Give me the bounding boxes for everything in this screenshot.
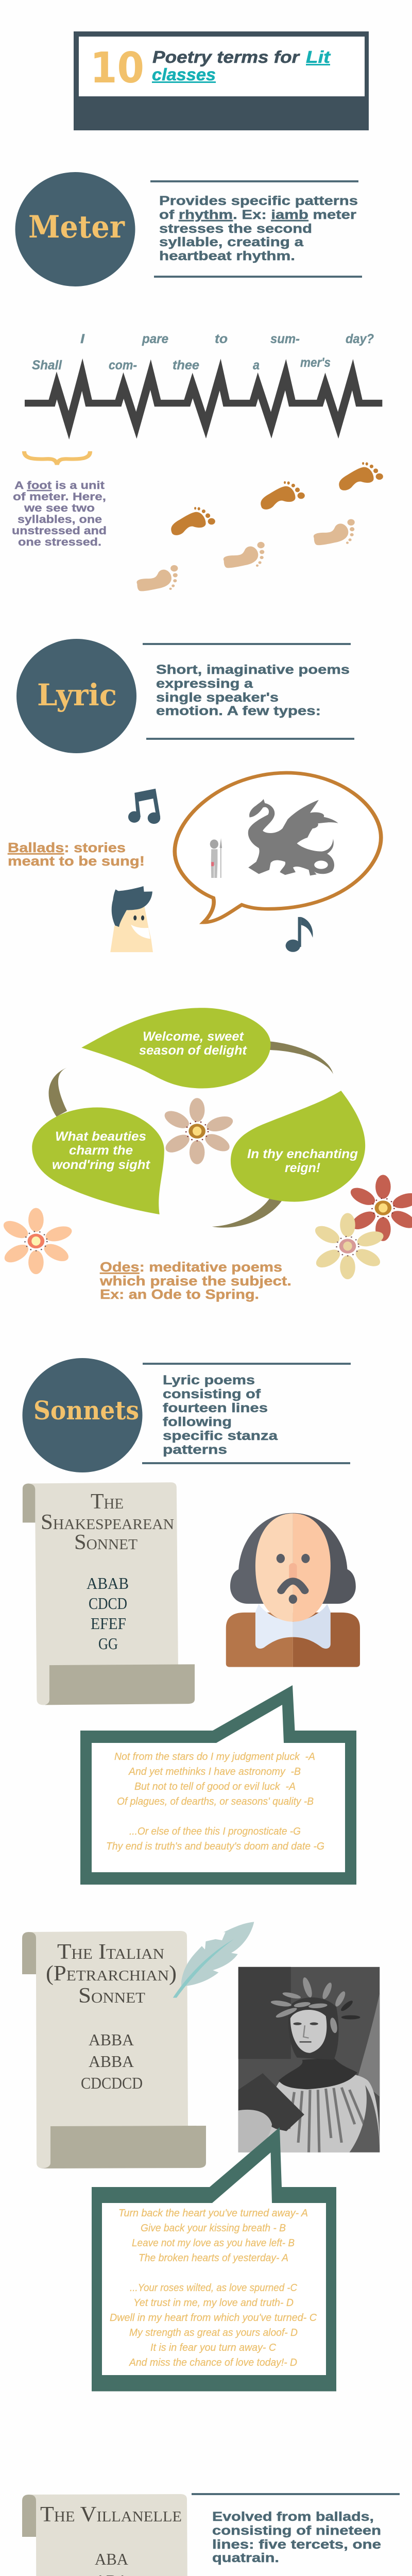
meter definition: heartbeat rhythm.	[159, 249, 295, 263]
scroll shape	[22, 1931, 206, 2168]
circle badge: Meter: Meter	[28, 209, 125, 245]
leaf text: season of delight	[139, 1043, 248, 1058]
icon: cream flower	[312, 1213, 386, 1279]
scroll shape	[22, 2494, 206, 2576]
leaf text	[52, 1029, 358, 1175]
scroll heading: (Petrarchian)	[46, 1962, 177, 1986]
lyric definition: emotion. A few types:	[156, 704, 321, 718]
sonnets definition: fourteen lines	[163, 1401, 268, 1415]
panel: villanelle scroll	[22, 2494, 206, 2576]
text: odes: Ex: an Ode to Spring.	[100, 1286, 259, 1302]
sonnets definition	[163, 1373, 278, 1457]
poem lines	[110, 2208, 317, 2368]
number ten: 10	[90, 44, 144, 93]
rhyme scheme: ABA	[95, 2550, 128, 2568]
poem lines: The broken hearts of yesterday- A	[139, 2252, 288, 2264]
title text	[152, 47, 331, 84]
poem lines	[106, 1751, 324, 1852]
circle badge: Sonnets: Sonnets	[33, 1395, 139, 1426]
text: foot definition: unstressed and	[12, 524, 107, 537]
poem lines: ...Your roses wilted, as love spurned -C	[130, 2282, 298, 2294]
poem lines: Yet trust in me, my love and truth- D	[133, 2297, 294, 2309]
poem lines: Not from the stars do I my judgment pluck -A	[114, 1751, 315, 1762]
syllables: I	[80, 332, 85, 346]
heartbeat line	[25, 375, 382, 425]
scroll heading: Sonnet	[78, 1984, 145, 2008]
text: ballads	[8, 840, 145, 869]
text: foot definition: syllables, one	[18, 513, 102, 526]
icon: Shakespeare portrait	[226, 1513, 360, 1667]
poem lines: Of plagues, of dearths, or seasons' quality -B	[117, 1796, 314, 1807]
text: odes	[99, 1259, 291, 1302]
syllables: mer's	[300, 355, 331, 370]
text: foot definition: of meter. Here,	[13, 490, 106, 503]
leaf stems and leaves	[32, 1008, 365, 1228]
text: ballads: meant to be sung!	[8, 853, 145, 869]
icon: peach flower	[0, 1208, 74, 1274]
leaf text: In thy enchanting	[247, 1147, 358, 1161]
icon: knight	[210, 838, 222, 878]
leaf text: What beauties	[55, 1129, 146, 1144]
icon: single music note	[286, 917, 313, 952]
leaf text: charm the	[69, 1143, 133, 1158]
icon: curly brace	[24, 451, 90, 465]
meter definition: of rhythm . Ex: iamb meter	[159, 208, 356, 222]
meter definition: stresses the second	[159, 222, 312, 236]
rhyme scheme: ABAB	[87, 1574, 129, 1592]
rhyme scheme: CDCD	[89, 1594, 127, 1613]
sonnets definition: Lyric poems	[163, 1373, 255, 1387]
leaf text: wond'ring sight	[52, 1158, 151, 1172]
text: foot definition: we see two	[24, 502, 95, 514]
syllables	[32, 332, 374, 372]
rhyme scheme	[81, 2030, 143, 2092]
sonnets definition: specific stanza	[163, 1429, 278, 1443]
text: odes: Odes : meditative poems	[100, 1259, 282, 1275]
syllables: Shall	[32, 358, 62, 372]
sonnets definition: patterns	[163, 1443, 227, 1457]
meter definition: syllable, creating a	[159, 235, 304, 249]
chart: iambic syllables above heartbeat line	[25, 332, 382, 425]
leaf text: reign!	[285, 1161, 320, 1175]
image: Petrarch portrait	[238, 1967, 380, 2153]
poem lines: But not to tell of good or evil luck -A	[134, 1781, 296, 1792]
rhyme scheme: EFEF	[91, 1614, 126, 1633]
syllables: thee	[173, 358, 199, 372]
sonnets definition: following	[163, 1415, 232, 1429]
poem lines: Dwell in my heart from which you've turned- C	[110, 2312, 317, 2324]
scroll heading: Sonnet	[74, 1531, 138, 1554]
icon: red flower	[347, 1175, 412, 1241]
scroll heading	[41, 1490, 174, 1554]
rhyme scheme: ABBA	[89, 2052, 134, 2071]
panel: title banner	[74, 31, 369, 130]
panel: odes leaves diagram	[32, 1008, 365, 1228]
syllables: sum-	[270, 332, 300, 346]
leaf text: Welcome, sweet	[143, 1029, 245, 1044]
meter definition	[159, 194, 358, 263]
panel: Shakespearean sonnet scroll	[23, 1482, 195, 1705]
panel: villanelle definition	[191, 2493, 400, 2576]
definition text: quatrain.	[212, 2551, 279, 2565]
definition text: consisting of nineteen	[212, 2523, 381, 2538]
scroll heading: The Italian	[57, 1940, 164, 1964]
definition text	[212, 2510, 381, 2565]
syllables: a	[253, 358, 260, 372]
rhyme scheme: ABBA	[89, 2030, 134, 2049]
icon: footprints	[136, 462, 383, 591]
syllables: to	[215, 332, 228, 346]
text: odes: which praise the subject.	[99, 1273, 291, 1289]
title text: Lit	[306, 47, 331, 66]
meter definition: Provides specific patterns	[159, 194, 358, 208]
definition text: Evolved from ballads,	[212, 2510, 374, 2524]
scroll heading	[46, 1940, 177, 2008]
syllables: day?	[346, 332, 374, 346]
title text: classes	[152, 65, 216, 84]
lyric definition: single speaker's	[156, 690, 279, 705]
syllables: pare	[142, 332, 168, 346]
text: ballads: Ballads : stories	[8, 840, 126, 855]
poem lines: And miss the chance of love today!- D	[129, 2357, 297, 2368]
poem lines: Leave not my love as you have left- B	[132, 2238, 295, 2249]
poem lines: Give back your kissing breath - B	[141, 2223, 286, 2234]
text: foot definition: A foot is a unit	[14, 479, 105, 492]
title text: Poetry terms for	[152, 47, 300, 66]
icon: dragon	[248, 799, 338, 876]
callout: Italian sonnet excerpt	[92, 2127, 336, 2392]
poem lines: My strength as great as yours aloof- D	[129, 2327, 298, 2338]
rhyme scheme: GG	[98, 1634, 118, 1653]
text: foot definition	[12, 479, 107, 548]
poem lines: ...Or else of thee this I prognosticate -G	[129, 1826, 301, 1837]
panel: Italian sonnet scroll	[22, 1931, 206, 2168]
poem lines: Thy end is truth's and beauty's doom and date -G	[106, 1841, 324, 1852]
scroll shape	[23, 1482, 195, 1705]
text: foot definition: one stressed.	[18, 536, 101, 548]
speech bubble with knight and dragon	[175, 773, 381, 922]
lyric definition: Short, imaginative poems	[156, 663, 350, 677]
definition text: lines: five tercets, one	[212, 2537, 381, 2552]
scroll heading: Shakespearean	[41, 1511, 174, 1534]
callout: Shakespeare sonnet excerpt	[80, 1685, 356, 1885]
laurel wreath	[270, 1977, 360, 2033]
icon: feather quill	[173, 1922, 254, 1998]
scroll heading: The	[91, 1490, 124, 1514]
rhyme scheme	[89, 2550, 134, 2576]
panel: lyric heading	[16, 639, 354, 753]
panel: meter heading	[15, 172, 362, 286]
rhyme scheme	[87, 1574, 129, 1653]
icon: tan flower	[161, 1098, 235, 1164]
syllables: com-	[109, 358, 137, 372]
scroll heading: The Villanelle	[40, 2503, 182, 2527]
circle badge: Sonnets	[23, 1358, 142, 1472]
poem lines: It is in fear you turn away- C	[150, 2342, 277, 2353]
lyric definition: expressing a	[156, 676, 253, 691]
circle badge: Lyric: Lyric	[37, 677, 117, 713]
circle badge: Meter	[15, 172, 135, 286]
rhyme scheme: CDCDCD	[81, 2074, 143, 2092]
poem lines: Turn back the heart you've turned away- A	[118, 2208, 308, 2219]
lyric definition	[156, 663, 350, 718]
icon: smiling singer head	[110, 886, 153, 952]
panel: sonnets heading	[23, 1358, 351, 1472]
icon: beamed music note	[128, 789, 160, 824]
circle badge: Lyric	[16, 639, 136, 753]
poem lines: And yet methinks I have astronomy -B	[128, 1766, 301, 1777]
sonnets definition: consisting of	[163, 1387, 261, 1401]
